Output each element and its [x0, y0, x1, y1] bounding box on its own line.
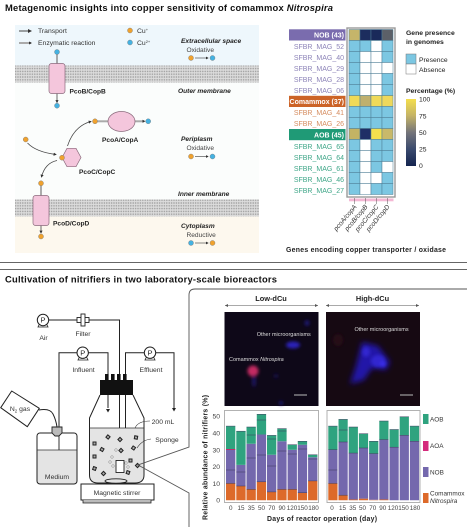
legend: arrows and ions: Enzymatic reaction — [38, 40, 96, 47]
legend: nitrifier groups: Nitrospira — [430, 498, 458, 505]
protein: PcoB/CopB: PcoB/CopB — [70, 88, 106, 96]
column labels: pcoA/copA — [332, 203, 359, 233]
schematic labels: Filter — [75, 331, 91, 338]
bar chart: Low-dCu: 50 — [212, 414, 220, 420]
schematic labels: Effluent — [140, 367, 163, 374]
sponges — [93, 435, 140, 476]
bar chart: Low-dCu: 150 — [297, 505, 308, 512]
legend: gene presence and percentage: 100 — [419, 96, 431, 104]
protein: PcoC/CopC: PcoC/CopC — [79, 169, 116, 176]
micrograph headings — [225, 294, 419, 307]
column labels: pcoB/copB — [343, 203, 370, 233]
row labels: SFBR_MAG_29 — [294, 66, 344, 73]
N2 gas cylinder: gas — [17, 406, 31, 413]
compartment labels: Outer membrane — [178, 88, 231, 95]
legend: nitrifier groups: NOB — [430, 470, 444, 476]
protein: PcoD/CopD: PcoD/CopD — [53, 220, 90, 228]
title: metagenomic panel: Metagenomic insights into copper sensitivity of comammox Nitrospira — [5, 2, 333, 13]
title: cultivation panel: Cultivation of nitrifiers in two laboratory-scale bioreactors — [5, 274, 277, 284]
protein: PcoA/CopA — [92, 112, 151, 144]
micrograph: Low-dCu — [224, 312, 318, 406]
row labels: AOB (45) — [314, 132, 344, 140]
row labels: SFBR_MAG_64 — [294, 155, 344, 162]
heatmap cells — [347, 28, 395, 197]
legend: nitrifier groups — [423, 414, 465, 505]
bar chart: Low-dCu: 70 — [268, 505, 276, 512]
x-axis title: Days of reactor operation (day) — [267, 516, 377, 523]
compartment labels — [178, 38, 241, 239]
panel: bioreactor schematic — [1, 314, 179, 503]
icon: filter — [77, 314, 89, 326]
protein: PcoB/CopB — [49, 50, 106, 108]
micrograph: Low-dCu: Comammox Nitrospira — [229, 357, 284, 363]
schematic labels: 200 mL — [152, 419, 175, 426]
x-axis title: Genes encoding copper transporter / oxidase — [286, 247, 446, 254]
compartment labels: Extracellular space — [181, 38, 241, 45]
compartment labels: Oxidative — [186, 47, 214, 54]
magnetic stirrer — [81, 484, 154, 503]
row labels: SFBR_MAG_61 — [294, 166, 344, 173]
heatmap: gene presence in genomes — [286, 28, 446, 254]
column labels — [332, 198, 394, 234]
panel: copper transport cell diagram — [15, 25, 259, 253]
tubing — [39, 320, 174, 468]
row labels: SFBR_MAG_52 — [294, 44, 344, 51]
protein: PcoD/CopD — [33, 181, 90, 239]
icon: air pump: P — [40, 316, 46, 325]
bar chart: Low-dCu: 35 — [248, 505, 255, 512]
compartment labels: Inner membrane — [178, 191, 230, 198]
medium bottle: Medium — [45, 474, 69, 481]
legend: gene presence and percentage: Percentage (%) — [406, 88, 455, 95]
legend: gene presence and percentage — [406, 30, 455, 170]
legend: gene presence and percentage: 75 — [419, 114, 427, 120]
bar chart: Low-dCu: 40 — [212, 430, 220, 438]
legend: arrows and ions: Transport — [38, 28, 67, 35]
legend: gene presence and percentage: Gene presence — [406, 30, 455, 37]
medium bottle — [37, 427, 77, 484]
zoom callout bracket — [138, 289, 467, 527]
magnetic stirrer: Magnetic stirrer — [94, 490, 141, 497]
bar chart: High-dCu: 35 — [349, 505, 357, 512]
icon: effluent pump: P — [147, 348, 153, 357]
protein: PcoC/CopC — [23, 122, 116, 177]
row labels: SFBR_MAG_28 — [294, 77, 344, 84]
row labels: SFBR_MAG_41 — [294, 110, 344, 117]
N2 gas cylinder: N — [10, 406, 15, 413]
micrograph headings: Low-dCu — [255, 294, 287, 303]
schematic labels: Influent — [72, 367, 95, 374]
legend: arrows and ions: + — [146, 27, 149, 32]
icon: redox reactions — [188, 56, 215, 246]
icon: air pump — [37, 314, 49, 327]
row labels: SFBR_MAG_65 — [294, 144, 344, 151]
compartment labels: Cytoplasm — [181, 223, 215, 230]
bar chart: Low-dCu: 30 — [212, 447, 220, 454]
bar chart: High-dCu: 15 — [339, 505, 346, 512]
schematic labels: Air — [39, 335, 48, 342]
legend: nitrifier groups: AOA — [430, 443, 444, 450]
legend: arrows and ions: 2+ — [146, 39, 151, 44]
legend: nitrifier groups: AOB — [430, 416, 444, 424]
protein: PcoA/CopA: PcoA/CopA — [102, 137, 139, 144]
legend: gene presence and percentage: 50 — [419, 130, 427, 137]
row labels: Comammox (37) — [290, 99, 344, 106]
legend: gene presence and percentage: in genomes — [406, 39, 444, 46]
compartment labels: Periplasm — [181, 136, 213, 143]
N2 gas cylinder: 2 — [15, 408, 18, 414]
bar chart: Low-dCu: 120 — [287, 505, 298, 512]
legend: arrows and ions — [19, 27, 151, 47]
bar chart: Low-dCu: 20 — [212, 464, 220, 471]
icon: effluent pump — [144, 347, 156, 360]
bar chart: Low-dCu: 15 — [237, 505, 245, 512]
bar chart: Low-dCu — [212, 410, 319, 512]
compartment labels: Reductive — [186, 232, 216, 239]
row labels: SFBR_MAG_26 — [294, 121, 344, 128]
reactor bottle — [90, 374, 151, 483]
bar chart: High-dCu — [327, 410, 421, 512]
legend: nitrifier groups: Comammox — [430, 490, 465, 498]
bar chart: High-dCu: 120 — [388, 505, 399, 512]
column labels: pcoC/copC — [354, 204, 381, 234]
icon: influent pump — [77, 347, 88, 360]
micrograph: High-dCu: Other microorganisms — [354, 327, 409, 333]
legend: gene presence and percentage: 0 — [419, 163, 423, 170]
legend: gene presence and percentage: Absence — [419, 67, 446, 74]
compartment labels: Oxidative — [186, 145, 214, 152]
row labels: SFBR_MAG_40 — [294, 55, 344, 62]
micrograph: Low-dCu: Other microorganisms — [257, 332, 311, 338]
bar chart: Low-dCu: 90 — [278, 505, 286, 512]
bar chart: High-dCu: 70 — [369, 505, 377, 512]
bar chart: High-dCu: 50 — [359, 505, 366, 512]
micrograph headings: High-dCu — [356, 294, 390, 303]
bar chart: Low-dCu: 0 — [216, 498, 220, 505]
row labels: NOB (43) — [314, 33, 344, 40]
bar chart: Low-dCu: 10 — [212, 481, 220, 488]
row labels: SFBR_MAG_06 — [294, 88, 344, 95]
y-axis title: Relative abundance of nitrifiers (%) — [202, 395, 210, 520]
row labels — [289, 29, 346, 195]
legend: gene presence and percentage: 25 — [419, 146, 427, 154]
legend: arrows and ions: Cu — [137, 40, 146, 47]
bar chart: Low-dCu: 180 — [308, 505, 319, 512]
icon: influent pump: P — [80, 348, 85, 357]
bar chart: High-dCu: 180 — [410, 505, 421, 512]
legend: arrows and ions: Cu — [137, 28, 146, 35]
micrograph: High-dCu — [326, 312, 420, 406]
bar chart: High-dCu: 150 — [398, 505, 409, 512]
row labels: SFBR_MAG_46 — [294, 177, 344, 184]
column labels: pcoD/copD — [365, 204, 392, 234]
N2 gas cylinder — [1, 391, 39, 427]
schematic labels — [39, 331, 179, 444]
bar chart: High-dCu: 90 — [379, 505, 387, 512]
bar chart: Low-dCu: 0 — [229, 505, 233, 512]
legend: gene presence and percentage: Presence — [419, 57, 448, 64]
bar chart: Low-dCu: 50 — [258, 505, 265, 512]
schematic labels: Sponge — [155, 437, 179, 444]
bar chart: High-dCu: 0 — [330, 505, 334, 512]
row labels: SFBR_MAG_27 — [294, 188, 344, 195]
